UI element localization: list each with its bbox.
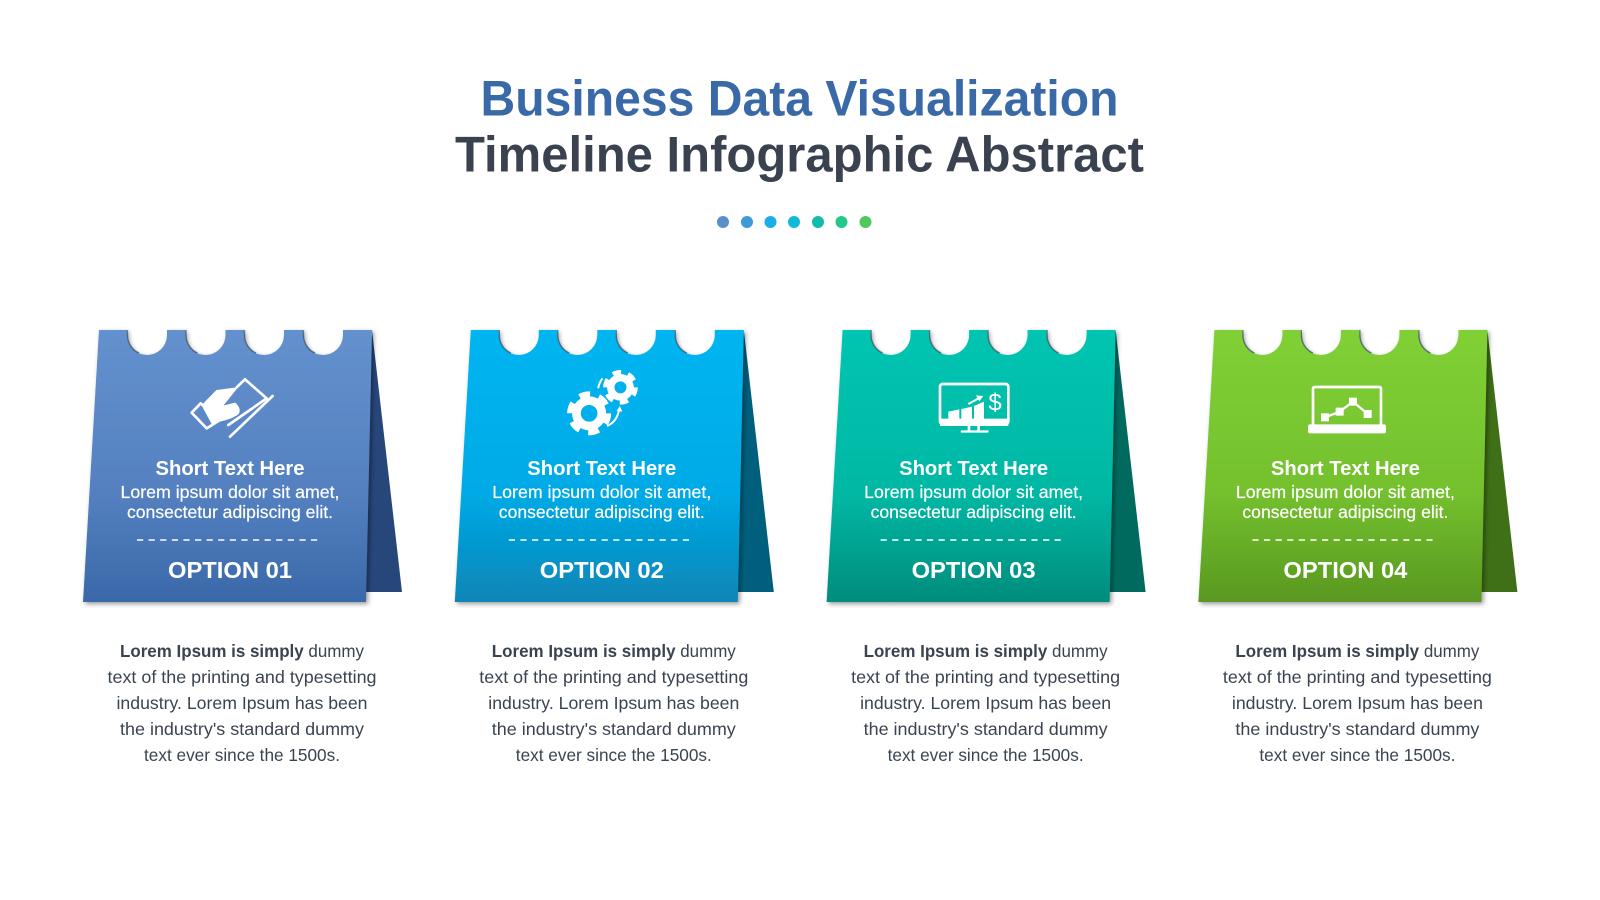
panel: option 02: consectetur adipiscing elit. <box>499 502 705 522</box>
option label: OPTION 04 <box>1283 557 1408 583</box>
short text body: Lorem ipsum dolor sit amet, <box>120 482 340 502</box>
card front <box>827 330 1116 602</box>
description: text of the printing and typesetting <box>108 667 376 687</box>
description <box>851 641 1120 765</box>
title line 2: Timeline Infographic Abstract <box>455 126 1144 182</box>
notch edge shadows <box>127 330 315 353</box>
description <box>108 641 376 765</box>
notch edge shadows <box>871 330 1059 353</box>
short text heading: Short Text Here <box>156 457 304 480</box>
description: the industry's standard dummy <box>120 719 364 739</box>
icon: monitor with rising chart and dollar <box>940 384 1008 433</box>
row of gradient dots <box>717 216 872 228</box>
icon: monitor with rising chart and dollar: $ <box>988 390 1002 417</box>
short text heading: Short Text Here <box>1271 457 1420 480</box>
panel: option 04: consectetur adipiscing elit. <box>1242 502 1448 522</box>
option label: OPTION 02 <box>540 557 664 583</box>
notch edge shadows <box>1243 330 1430 353</box>
description: text ever since the 1500s. <box>516 745 712 765</box>
description: Lorem Ipsum is simply dummy <box>1235 641 1480 661</box>
card front <box>455 330 744 602</box>
card front <box>1198 330 1487 602</box>
description: the industry's standard dummy <box>492 719 736 739</box>
description: Lorem Ipsum is simply dummy <box>120 641 364 661</box>
description: Lorem Ipsum is simply dummy <box>864 641 1108 661</box>
description: the industry's standard dummy <box>1235 719 1480 739</box>
short text body: Lorem ipsum dolor sit amet, <box>1236 482 1455 502</box>
icon: gears <box>570 373 635 432</box>
card back flap <box>1475 330 1517 592</box>
description: the industry's standard dummy <box>864 719 1108 739</box>
short text heading: Short Text Here <box>899 457 1048 480</box>
card back flap <box>1104 330 1146 592</box>
description: text of the printing and typesetting <box>1223 667 1492 687</box>
option label: OPTION 03 <box>912 557 1036 583</box>
title <box>455 70 1144 182</box>
description: industry. Lorem Ipsum has been <box>860 693 1111 713</box>
panel: option 03: consectetur adipiscing elit. <box>871 502 1077 522</box>
card back flap <box>360 330 402 592</box>
description: industry. Lorem Ipsum has been <box>1232 693 1483 713</box>
icon: hand with banknote <box>192 379 273 437</box>
short text body: Lorem ipsum dolor sit amet, <box>492 482 711 502</box>
description <box>1223 641 1492 765</box>
description: Lorem Ipsum is simply dummy <box>492 641 736 661</box>
description: industry. Lorem Ipsum has been <box>116 693 368 713</box>
icon: laptop with line chart <box>1308 387 1386 433</box>
panel: option 04 <box>1198 330 1517 765</box>
short text body: Lorem ipsum dolor sit amet, <box>864 482 1083 502</box>
description: industry. Lorem Ipsum has been <box>488 693 739 713</box>
description: text ever since the 1500s. <box>888 745 1084 765</box>
panel: option 01: consectetur adipiscing elit. <box>127 502 333 522</box>
description: text ever since the 1500s. <box>144 745 340 765</box>
description: text of the printing and typesetting <box>479 667 748 687</box>
panel: option 02 <box>455 330 774 765</box>
panel: option 03 <box>827 330 1146 765</box>
short text heading: Short Text Here <box>527 457 676 480</box>
card back flap <box>732 330 774 592</box>
notch edge shadows <box>499 330 687 353</box>
title line 1: Business Data Visualization <box>480 70 1118 126</box>
card front <box>83 330 372 602</box>
panel: option 01 <box>83 330 402 765</box>
description <box>479 641 748 765</box>
description: text ever since the 1500s. <box>1259 745 1455 765</box>
option label: OPTION 01 <box>168 557 292 583</box>
description: text of the printing and typesetting <box>851 667 1120 687</box>
